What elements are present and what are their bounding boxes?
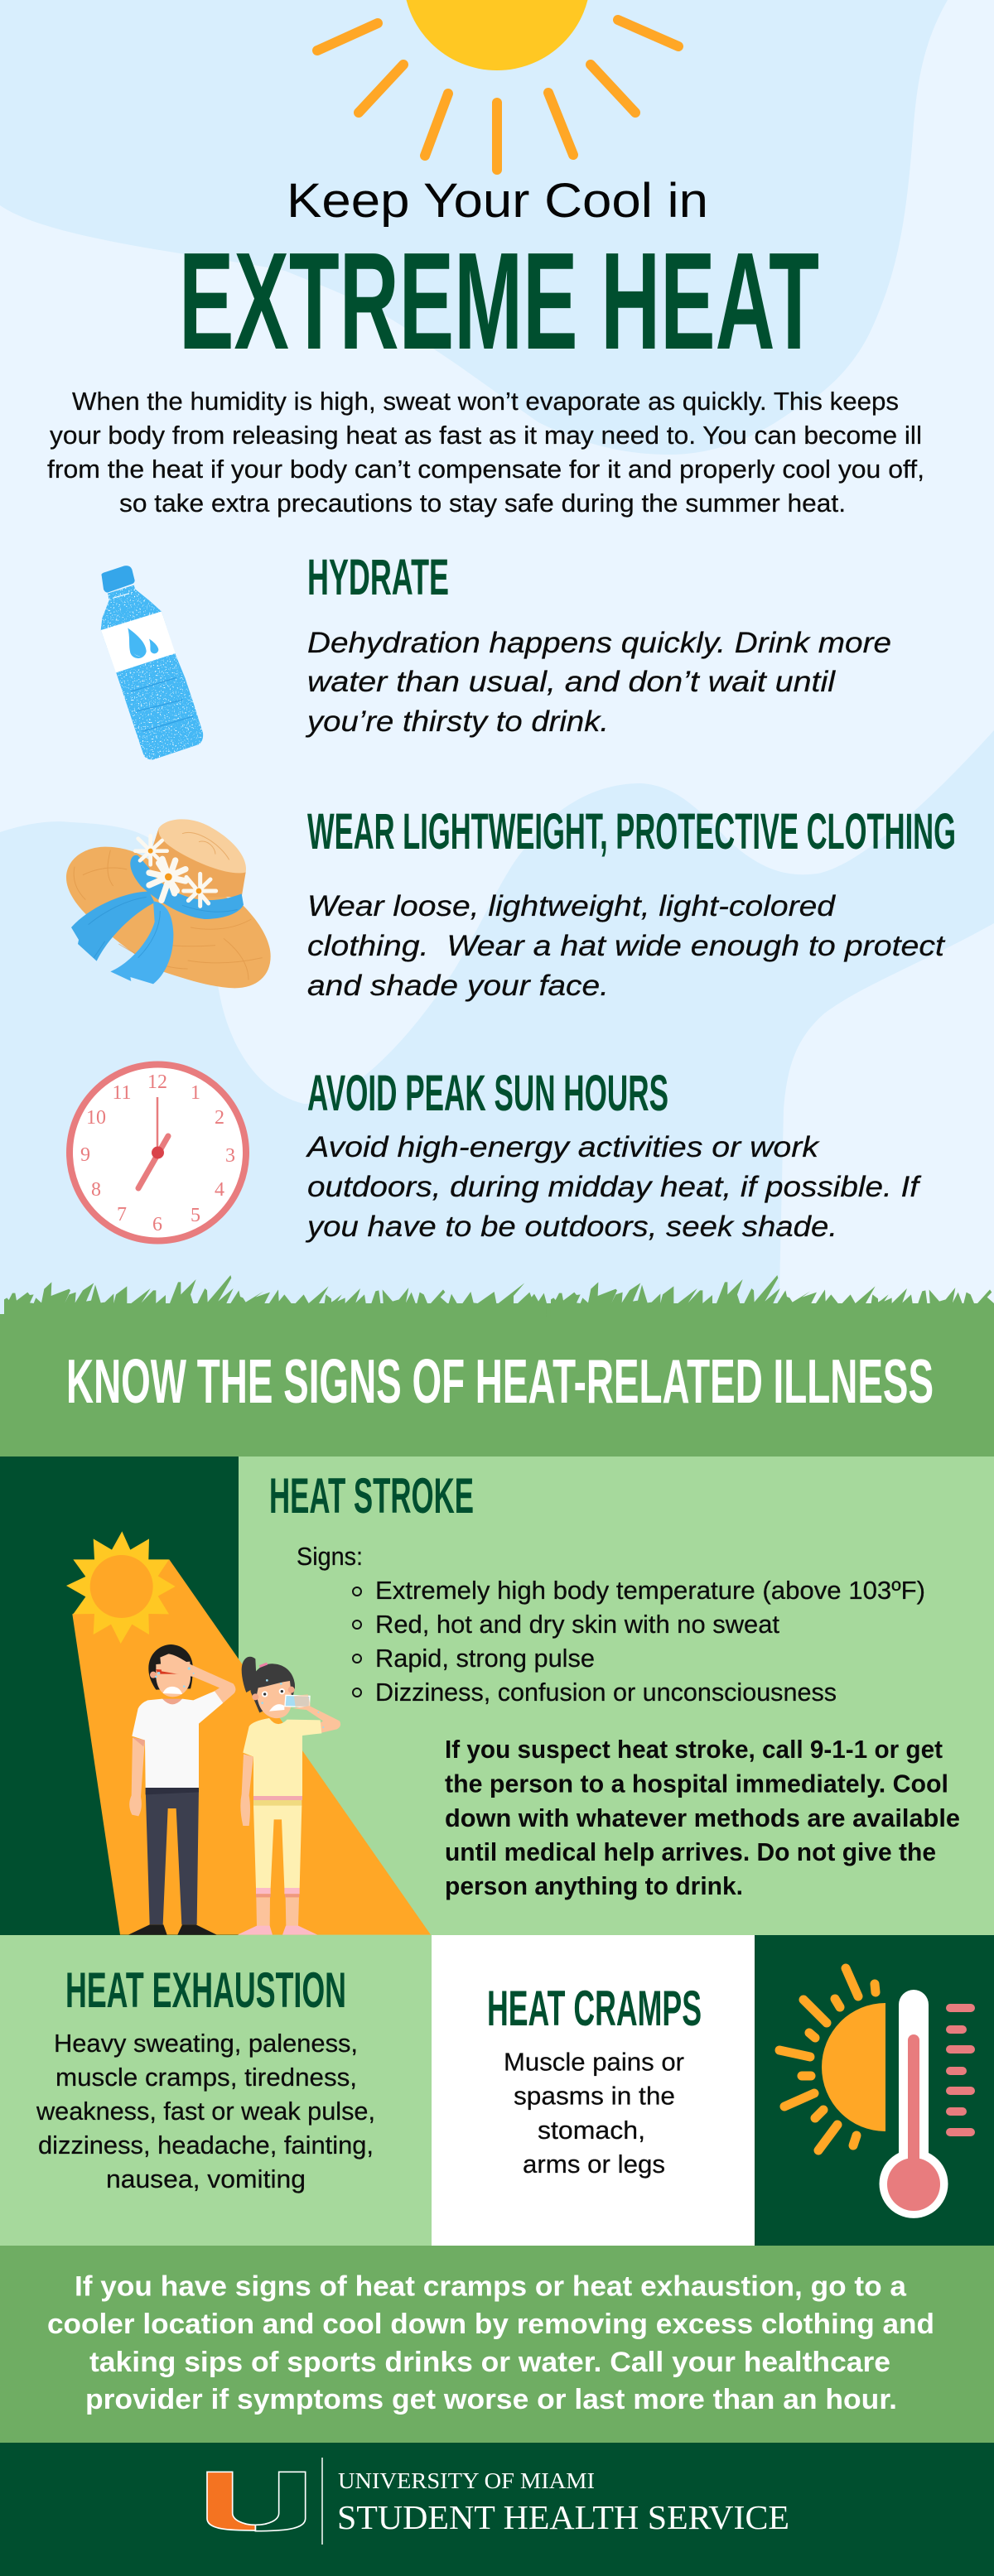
title: Keep Your Cool in: Keep Your Cool in [287,174,708,228]
text: student health service: STUDENT HEALTH SERVICE [337,2498,789,2536]
text: heat cramps symptoms: arms or legs [523,2150,665,2179]
icon: clock: 1 [191,1082,200,1104]
panel: heat cramps [432,1935,755,2246]
text: signs list [297,1543,925,1707]
panel: heat stroke [0,1457,994,1935]
text: university of miami: UNIVERSITY OF MIAMI [338,2468,595,2493]
logo: University of Miami U [207,2472,306,2531]
icon: clock: 10 [86,1107,106,1129]
icon: clock: 12 [147,1071,167,1093]
text: heat cramps symptoms: spasms in the [514,2082,675,2110]
text: heat stroke call to action: If you suspect heat stroke, call 9-1-1 or get [445,1736,943,1764]
panel: cooling advice band: cooler location and cool down by removing excess clothing and [47,2309,934,2340]
text: heat exhaustion symptoms: dizziness, headache, fainting, [38,2131,374,2160]
text: heat exhaustion symptoms: muscle cramps, tiredness, [55,2063,357,2092]
text: heat stroke call to action [445,1736,960,1900]
intro paragraph: When the humidity is high, sweat won’t evaporate as quickly. This keeps [72,388,899,416]
text: heat cramps symptoms [504,2049,684,2179]
illustration: sun beam with overheated people [66,1531,431,1935]
text: sun hours body: you have to be outdoors, seek shade. [306,1211,837,1243]
text: heat exhaustion symptoms: weakness, fast or weak pulse, [36,2097,375,2126]
figure: woman [238,1657,340,1935]
icon: clock: 2 [215,1107,224,1129]
icon: clock: 7 [117,1204,127,1225]
intro paragraph [47,388,924,518]
heading: heat cramps: HEAT CRAMPS [487,1981,702,2036]
icon: clock [70,1065,246,1240]
text: hydrate body: water than usual, and don’t wait until [307,666,836,698]
intro paragraph: from the heat if your body can’t compensate for it and properly cool you off, [47,455,924,484]
text: clothing body [307,890,945,1002]
text: clothing body: Wear loose, lightweight, light-colored [307,890,837,922]
heading: avoid peak sun hours: AVOID PEAK SUN HOURS [307,1065,668,1121]
icon: clock: 11 [112,1082,132,1104]
heading: heat exhaustion: HEAT EXHAUSTION [65,1962,346,2018]
icon: clock: 6 [152,1214,162,1235]
icon: sun hat [66,819,271,988]
text: heat stroke call to action: person anything to drink. [445,1872,743,1900]
text: heat cramps symptoms: Muscle pains or [504,2049,684,2077]
icon: clock: 4 [215,1179,224,1201]
intro paragraph: your body from releasing heat as fast as it may need to. You can become ill [50,421,922,450]
panel: cooling advice band [0,2246,994,2443]
text: heat exhaustion symptoms: nausea, vomiting [106,2165,306,2193]
panel: know the signs band with grass [0,1275,994,1457]
icon: water bottle [99,566,205,760]
text: heat stroke call to action: down with whatever methods are available [445,1804,960,1832]
text: heat stroke call to action: until medical help arrives. Do not give the [445,1838,936,1866]
icon: clock: 5 [191,1205,200,1226]
heading: heat stroke: HEAT STROKE [269,1468,474,1524]
icon: clock: 9 [80,1144,90,1166]
text: signs list: Red, hot and dry skin with no sweat [375,1611,780,1639]
text: signs list: Rapid, strong pulse [375,1644,595,1673]
text: hydrate body: Dehydration happens quickly. Drink more [307,627,891,659]
text: sun hours body [306,1131,922,1243]
icon: clock: 8 [91,1179,101,1201]
text: heat stroke call to action: the person to a hospital immediately. Cool [445,1770,948,1798]
text: hydrate body [306,627,891,738]
text: hydrate body: you’re thirsty to drink. [306,705,609,738]
text: signs list: Extremely high body temperature (above 103ºF) [375,1577,925,1605]
panel: heat exhaustion [0,1935,432,2246]
text: heat cramps symptoms: stomach, [538,2116,645,2145]
icon: clock: 3 [225,1145,235,1167]
text: clothing body: clothing. Wear a hat wide enough to protect [307,930,945,962]
text: sun hours body: Avoid high-energy activities or work [306,1131,820,1163]
text: signs list: Signs: [297,1543,363,1571]
panel: cooling advice band: If you have signs of heat cramps or heat exhaustion, go to a [75,2271,907,2303]
heading: hydrate: HYDRATE [307,549,449,605]
panel: footer [0,2443,994,2576]
intro paragraph: so take extra precautions to stay safe during the summer heat. [119,489,846,518]
panel: thermometer icon [755,1935,994,2246]
text: heat exhaustion symptoms: Heavy sweating, paleness, [54,2030,358,2058]
panel: cooling advice band: taking sips of sports drinks or water. Call your healthcare [89,2347,890,2378]
figure: man [128,1644,235,1935]
text: sun hours body: outdoors, during midday heat, if possible. If [307,1171,922,1203]
panel: cooling advice band: provider if symptoms get worse or last more than an hour. [85,2384,897,2415]
text: clothing body: and shade your face. [307,970,609,1002]
text: signs list: Dizziness, confusion or unconsciousness [375,1678,837,1707]
icon: sun with rays [317,0,678,170]
text: heat exhaustion symptoms [36,2030,375,2193]
